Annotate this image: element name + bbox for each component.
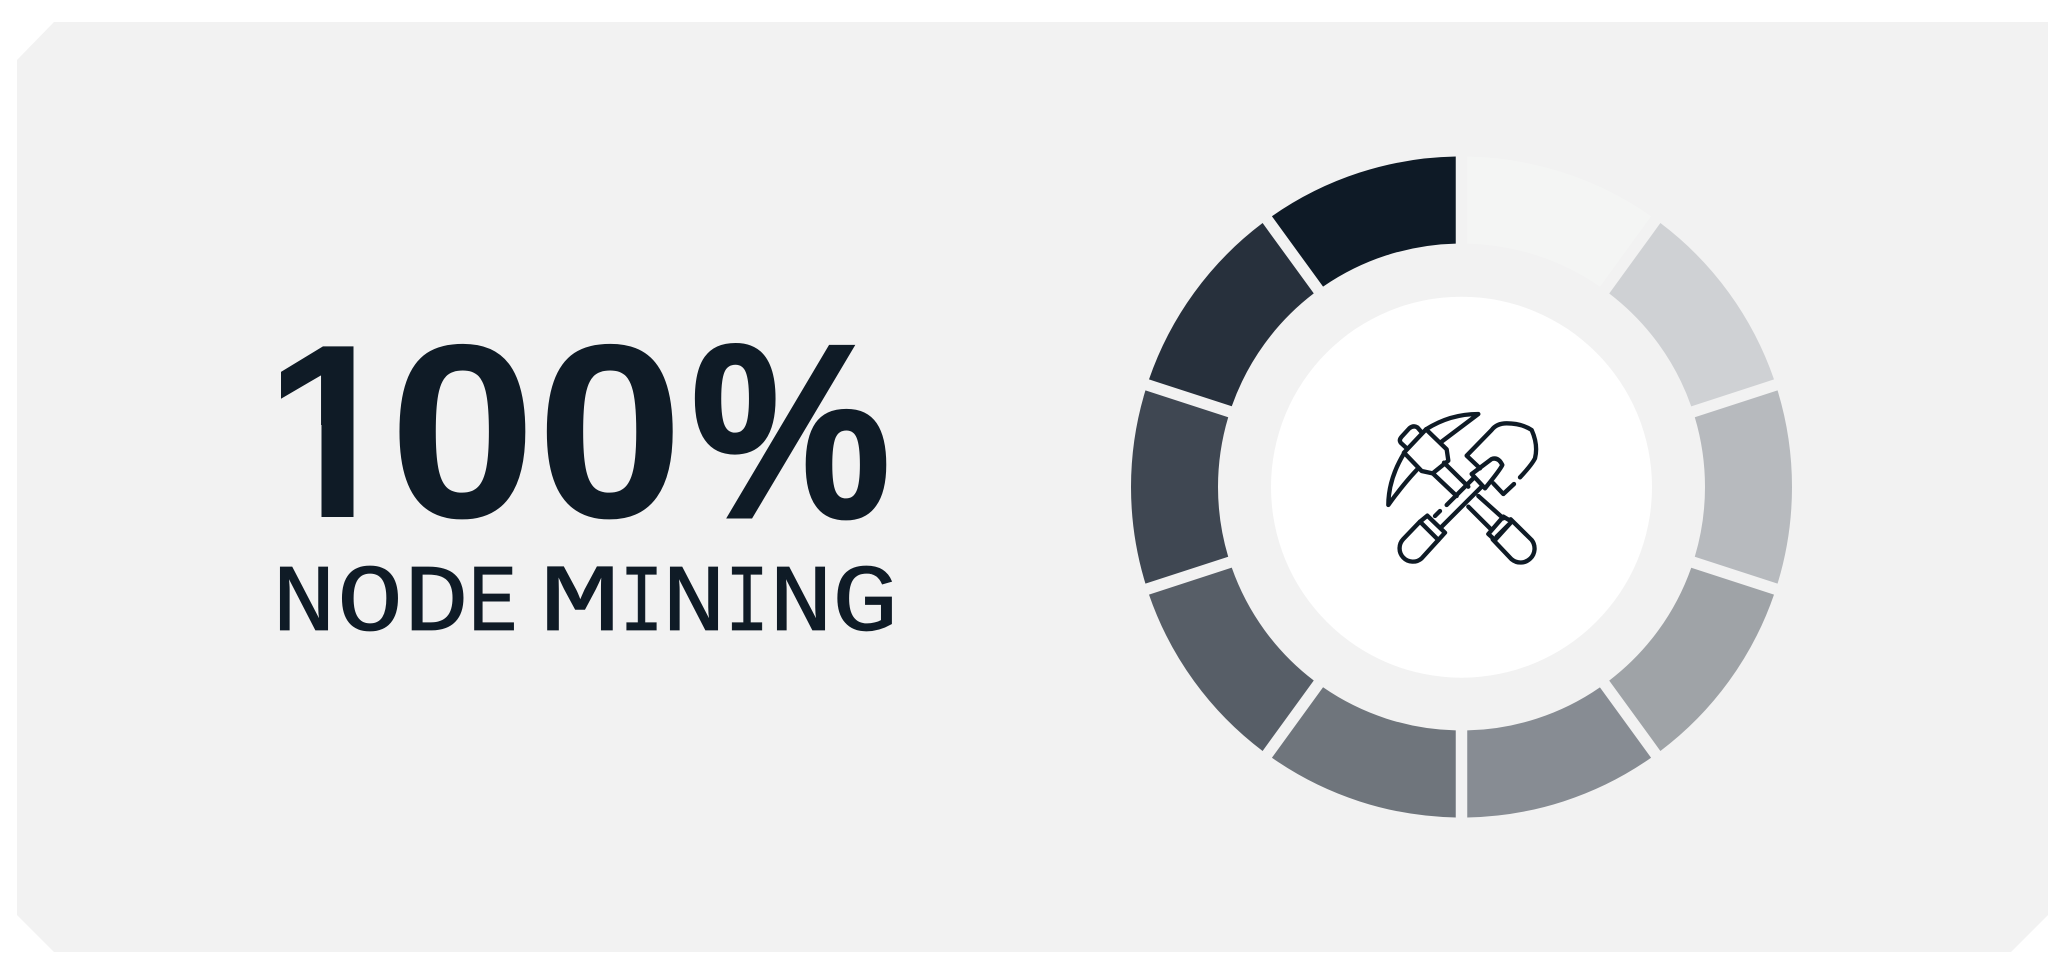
subheading: NODE MINING: N [662, 550, 726, 659]
subheading: NODE MINING: E [468, 551, 518, 660]
chart: segmented ring [1089, 108, 1834, 866]
white centre circle [1271, 297, 1652, 678]
heading: 100% [281, 343, 886, 520]
pickaxe [1388, 414, 1535, 563]
subheading: NODE MINING: O [337, 551, 403, 660]
subheading: NODE MINING: D [403, 550, 469, 659]
icon: crossed pickaxe and shovel [1388, 414, 1536, 563]
heading: 100%: 0 [389, 294, 536, 570]
subheading: NODE MINING: M [539, 551, 621, 659]
heading: 100%: % [691, 294, 891, 570]
subheading: NODE MINING: I [725, 550, 769, 659]
subheading: NODE MINING: N [272, 550, 336, 659]
shovel [1400, 423, 1536, 562]
subheading: NODE MINING: N [769, 550, 833, 659]
heading: 100%: 1 [259, 294, 406, 570]
subheading: NODE MINING: I [619, 550, 664, 659]
subheading: NODE MINING [272, 550, 898, 660]
heading: 100%: 0 [536, 294, 684, 570]
subheading: NODE MINING: G [832, 551, 898, 660]
